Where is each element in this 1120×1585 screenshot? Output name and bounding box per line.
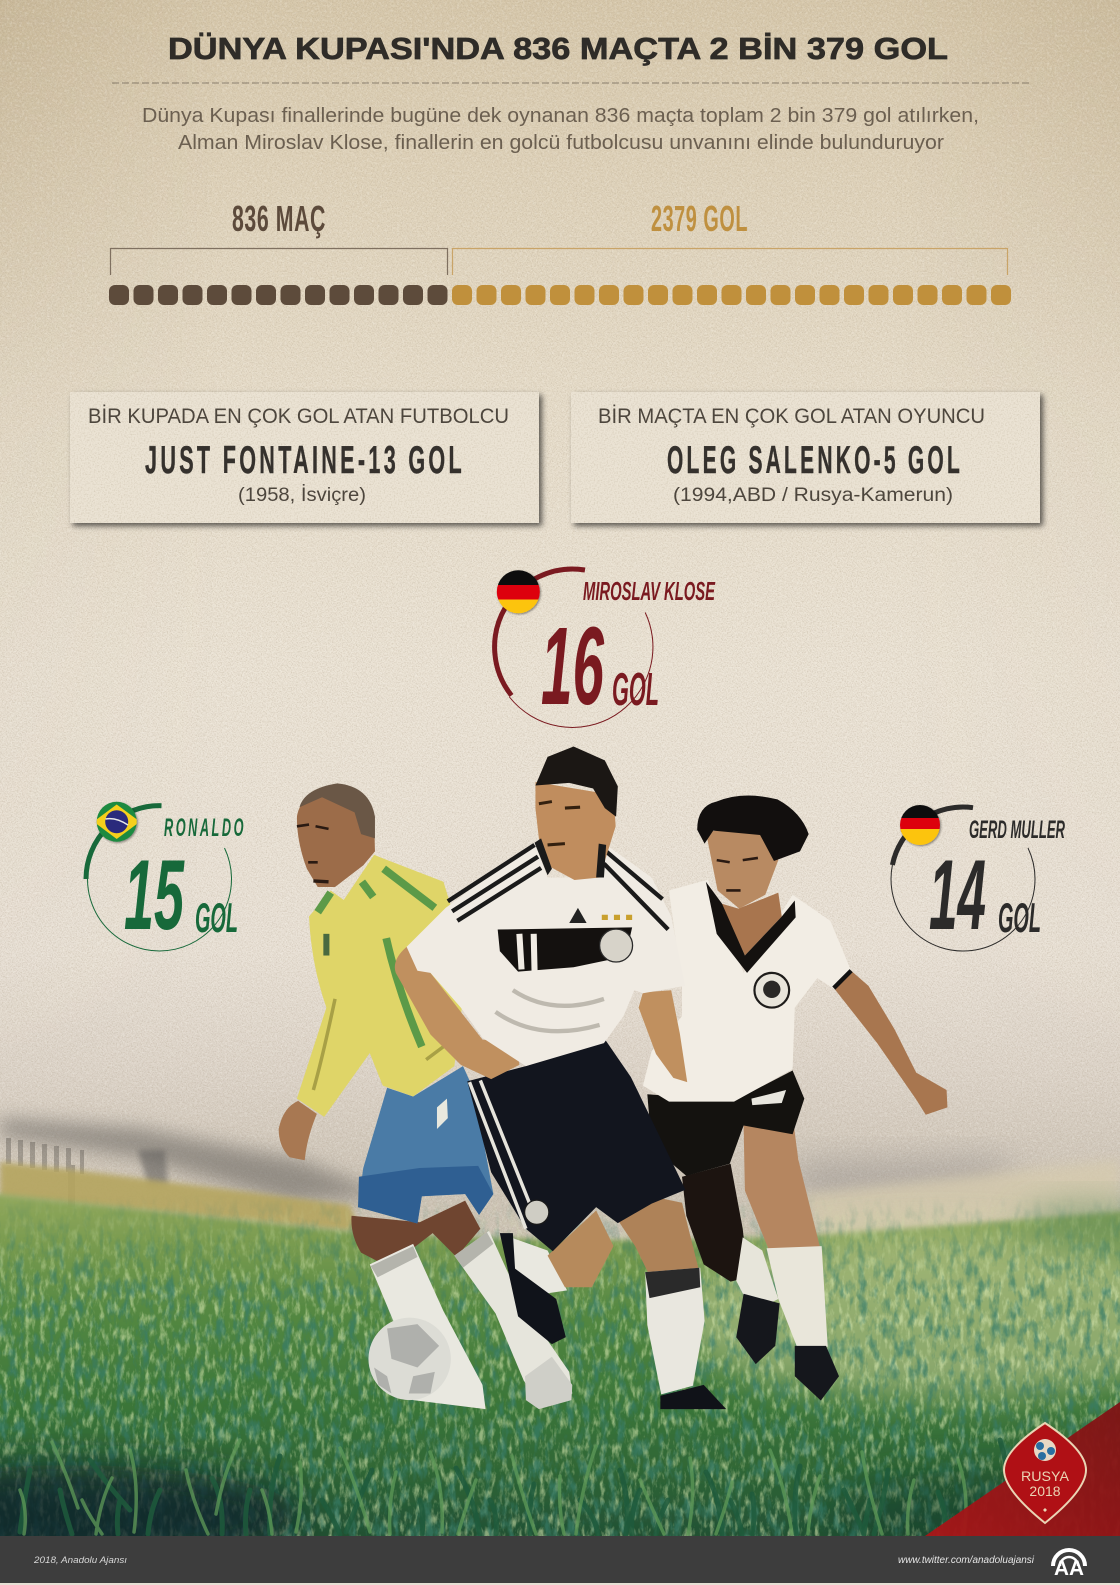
stat: 836 maç: 836 MAÇ xyxy=(232,198,326,239)
player: Miroslav Klose xyxy=(395,746,726,1409)
badge: Rusya 2018: 2018 xyxy=(1029,1483,1061,1499)
panel: most goals in one cup: (1958, İsviçre) xyxy=(238,485,366,506)
callout: Gerd Muller 14 goals xyxy=(891,805,1065,951)
badge: Rusya 2018: RUSYA xyxy=(1021,1468,1070,1484)
red corner ribbon xyxy=(925,1402,1120,1536)
badge: Rusya 2018 xyxy=(1004,1423,1086,1523)
panel: most goals in one match xyxy=(571,392,1040,523)
panel: most goals in one cup xyxy=(70,392,539,523)
callout: Gerd Muller 14 goals: 14 xyxy=(929,839,986,950)
icon: Brazilian flag xyxy=(94,801,140,843)
callout: Ronaldo 15 goals: RONALDO xyxy=(164,814,246,842)
panel: most goals in one cup: JUST FONTAINE-13 GOL xyxy=(145,439,465,482)
foreground grass blades xyxy=(20,1440,1006,1534)
callout: Klose 16 goals: GOL xyxy=(612,663,659,715)
panel: most goals in one match: BİR MAÇTA EN ÇOK GOL ATAN OYUNCU xyxy=(598,405,985,428)
background: paper texture xyxy=(0,0,1120,1242)
intro text xyxy=(142,105,979,154)
players illustration xyxy=(279,746,947,1409)
stat: 2379 gol xyxy=(452,198,1011,305)
stat: 836 maç xyxy=(109,198,448,305)
footer bar: www.twitter.com/anadoluajansi xyxy=(898,1555,1035,1566)
grass field xyxy=(0,1184,1120,1536)
player: Ronaldo xyxy=(279,783,572,1409)
callout: Klose 16 goals xyxy=(495,569,715,728)
callout: Klose 16 goals: MIROSLAV KLOSE xyxy=(583,576,715,606)
stadium haze on the horizon xyxy=(0,1118,1120,1240)
stat: 2379 gol: 2379 GOL xyxy=(651,198,748,239)
intro text: Alman Miroslav Klose, finallerin en golcü futbolcusu unvanını elinde bulunduruyor xyxy=(178,132,944,154)
footer bar: 2018, Anadolu Ajansı xyxy=(33,1555,128,1565)
title: DÜNYA KUPASI'NDA 836 MAÇTA 2 BİN 379 GOL xyxy=(168,31,948,66)
player: Gerd Muller xyxy=(643,796,947,1401)
callout: Ronaldo 15 goals xyxy=(86,801,246,951)
icon: AA logo: AA xyxy=(1054,1557,1084,1580)
callout: Gerd Muller 14 goals: GOL xyxy=(998,894,1041,941)
callout: Ronaldo 15 goals: GOL xyxy=(195,894,238,941)
callout: Ronaldo 15 goals: 15 xyxy=(124,839,185,950)
ball xyxy=(368,1318,451,1400)
panel: most goals in one match: (1994,ABD / Rusya-Kamerun) xyxy=(673,485,953,506)
callout: Klose 16 goals: 16 xyxy=(541,605,604,728)
icon: German flag xyxy=(496,570,540,614)
footer bar xyxy=(0,1536,1120,1585)
icon: German flag small xyxy=(900,805,940,845)
panel: most goals in one cup: BİR KUPADA EN ÇOK GOL ATAN FUTBOLCU xyxy=(88,405,509,428)
intro text: Dünya Kupası finallerinde bugüne dek oynanan 836 maçta toplam 2 bin 379 gol atılırken, xyxy=(142,105,979,127)
